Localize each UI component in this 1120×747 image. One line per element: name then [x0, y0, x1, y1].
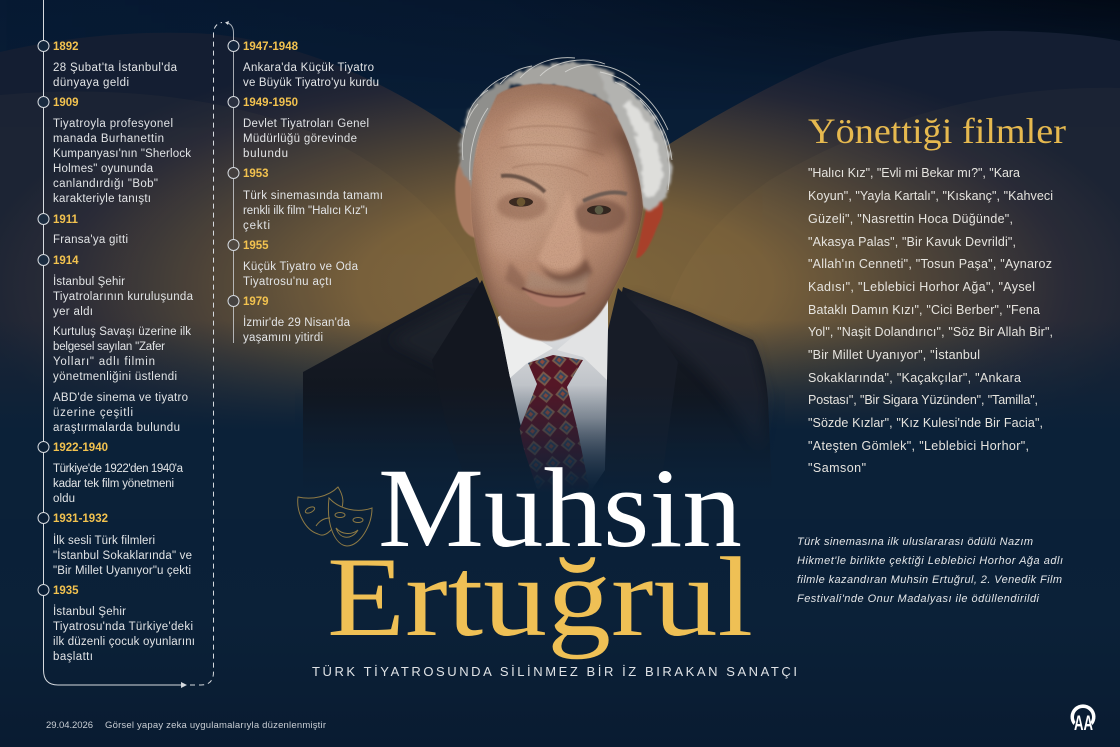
callout: award note: Festivali'nde Onur Madalyası ile ödüllendirildi	[797, 593, 1040, 605]
film list: Bataklı Damın Kızı", "Cici Berber", "Fena	[808, 303, 1040, 317]
milestone 1922-1940: 1922-1940	[53, 442, 108, 454]
milestone 1949-1950: 1949-1950	[243, 97, 298, 109]
timeline track	[44, 0, 234, 688]
film list: "Samson"	[808, 461, 866, 475]
film list: "Bir Millet Uyanıyor", "İstanbul	[808, 348, 980, 362]
milestone 1922-1940	[38, 442, 184, 505]
milestone 1909: Holmes" oyununda	[53, 163, 154, 175]
film list: "Ateşten Gömlek", "Leblebici Horhor",	[808, 439, 1029, 453]
milestone 1914: araştırmalarda bulundu	[53, 422, 180, 434]
milestone 1909: Kumpanyası'nın "Sherlock	[53, 148, 191, 160]
film list	[808, 166, 1053, 475]
milestone 1914: belgesel sayılan "Zafer	[53, 341, 165, 353]
milestone 1911: 1911	[53, 214, 79, 226]
milestone 1953: Türk sinemasında tamamı	[243, 190, 383, 202]
milestone 1914: yönetmenliğini üstlendi	[53, 371, 177, 383]
milestone 1979	[228, 296, 351, 344]
footer: 29.04.2026	[46, 720, 93, 731]
milestone 1922-1940: oldu	[53, 493, 75, 505]
milestone 1892: 1892	[53, 41, 79, 53]
milestone 1911	[38, 214, 128, 246]
milestone 1979: yaşamını yitirdi	[243, 332, 323, 344]
milestone 1955: Küçük Tiyatro ve Oda	[243, 261, 359, 273]
milestone 1935: başlattı	[53, 651, 93, 663]
milestone 1955	[228, 240, 359, 288]
suit	[303, 277, 772, 492]
milestone 1955: Tiyatrosu'nu açtı	[243, 276, 332, 288]
milestone 1914: Kurtuluş Savaşı üzerine ilk	[53, 326, 191, 338]
tie	[519, 355, 590, 492]
milestone 1892	[38, 40, 178, 89]
milestone 1947-1948: Ankara'da Küçük Tiyatro	[243, 62, 374, 74]
milestone 1909	[38, 96, 191, 205]
film list: Postası", "Bir Sigara Yüzünden", "Tamilla",	[808, 393, 1038, 407]
milestone 1947-1948: ve Büyük Tiyatro'yu kurdu	[243, 77, 379, 89]
milestone 1914: 1914	[53, 255, 79, 267]
film list: Güzeli", "Nasrettin Hoca Düğünde",	[808, 212, 1013, 226]
film list: "Sözde Kızlar", "Kız Kulesi'nde Bir Facia",	[808, 416, 1043, 430]
milestone 1914: ABD'de sinema ve tiyatro	[53, 392, 188, 404]
icon: theatre masks	[298, 487, 372, 546]
milestone 1949-1950: bulundu	[243, 148, 288, 160]
milestone 1909: karakteriyle tanıştı	[53, 193, 151, 205]
milestone 1979: 1979	[243, 296, 269, 308]
milestone 1892: dünyaya geldi	[53, 77, 129, 89]
milestone 1935: Tiyatrosu'nda Türkiye'deki	[53, 621, 193, 633]
milestone 1914: Tiyatrolarının kuruluşunda	[53, 291, 194, 303]
face	[471, 84, 643, 341]
milestone 1931-1932: İlk sesli Türk filmleri	[53, 534, 155, 547]
milestone 1909: 1909	[53, 97, 79, 109]
portrait: Muhsin Ertuğrul	[303, 58, 772, 492]
lapels	[432, 280, 538, 492]
milestone 1909: manada Burhanettin	[53, 133, 164, 145]
film list: Kadısı", "Leblebici Horhor Ağa", "Aysel	[808, 280, 1035, 294]
ears	[455, 159, 663, 258]
shirt	[498, 300, 608, 492]
eyes	[509, 197, 611, 215]
timeline column 1	[38, 40, 195, 663]
milestone 1931-1932	[38, 512, 192, 577]
callout: award note: Hikmet'le birlikte çektiği Leblebici Horhor Ağa adlı	[797, 555, 1063, 567]
icon: AA logo	[1070, 704, 1096, 735]
milestone 1935: 1935	[53, 585, 79, 597]
milestone 1911: Fransa'ya gitti	[53, 234, 128, 246]
milestone 1949-1950	[228, 96, 369, 160]
footer: Görsel yapay zeka uygulamalarıyla düzenlenmiştir	[105, 720, 326, 731]
milestone 1909: canlandırdığı "Bob"	[53, 178, 158, 190]
milestone 1914: üzerine çeşitli	[53, 407, 133, 419]
title	[327, 446, 753, 660]
film list: Sokaklarında", "Kaçakçılar", "Ankara	[808, 371, 1021, 385]
background	[0, 0, 1120, 418]
title: Ertuğrul: Ertuğrul	[327, 535, 753, 660]
milestone 1931-1932: "İstanbul Sokaklarında" ve	[53, 549, 192, 562]
milestone 1949-1950: Devlet Tiyatroları Genel	[243, 118, 369, 130]
milestone 1914: İstanbul Şehir	[53, 275, 125, 288]
milestone 1892: 28 Şubat'ta İstanbul'da	[53, 61, 178, 74]
timeline column 2	[228, 40, 383, 344]
callout: award note	[797, 536, 1063, 605]
film list: "Akasya Palas", "Bir Kavuk Devrildi",	[808, 235, 1016, 249]
icon: AA logo: AA	[1074, 712, 1093, 735]
heading: Yönettiği filmler	[808, 111, 1066, 151]
milestone 1953	[228, 168, 383, 232]
milestone 1935: İstanbul Şehir	[53, 605, 126, 618]
milestone 1953: renkli ilk film "Halıcı Kız"ı	[243, 205, 368, 217]
milestone 1914	[38, 254, 194, 434]
milestone 1935	[38, 584, 195, 663]
forehead wrinkles	[500, 126, 604, 176]
film list: "Halıcı Kız", "Evli mi Bekar mı?", "Kara	[808, 166, 1020, 180]
milestone 1949-1950: Müdürlüğü görevinde	[243, 133, 357, 145]
milestone 1914: yer aldı	[53, 306, 93, 318]
subtitle: TÜRK TİYATROSUNDA SİLİNMEZ BİR İZ BIRAKAN SANATÇI	[312, 664, 797, 679]
milestone 1931-1932: "Bir Millet Uyanıyor"u çekti	[53, 565, 191, 577]
collar	[498, 307, 608, 380]
milestone 1931-1932: 1931-1932	[53, 513, 108, 525]
milestone 1953: çekti	[243, 220, 270, 232]
milestone 1922-1940: kadar tek film yönetmeni	[53, 478, 174, 490]
portrait fade	[295, 385, 785, 493]
milestone 1922-1940: Türkiye'de 1922'den 1940'a	[53, 463, 184, 475]
milestone 1909: Tiyatroyla profesyonel	[53, 118, 173, 130]
film list: Koyun", "Yayla Kartalı", "Kıskanç", "Kahveci	[808, 189, 1053, 203]
panel: directed films	[808, 111, 1066, 475]
milestone 1955: 1955	[243, 240, 269, 252]
eyebrows	[501, 176, 627, 201]
film list: "Allah'ın Cenneti", "Tosun Paşa", "Aynaroz	[808, 257, 1052, 271]
milestone 1953: 1953	[243, 168, 269, 180]
film list: Yol", "Naşit Dolandırıcı", "Söz Bir Allah Bir",	[808, 325, 1053, 339]
milestone 1935: ilk düzenli çocuk oyunlarını	[53, 636, 195, 648]
title: Muhsin: Muhsin	[378, 446, 742, 571]
skin texture	[473, 104, 620, 341]
milestone 1947-1948: 1947-1948	[243, 41, 299, 53]
face shading	[471, 102, 643, 341]
callout: award note: Türk sinemasına ilk uluslararası ödülü Nazım	[797, 536, 1033, 548]
milestone 1947-1948	[228, 40, 379, 89]
milestone 1979: İzmir'de 29 Nisan'da	[243, 316, 351, 329]
hair	[460, 58, 672, 210]
milestone 1914: Yolları" adlı filmin	[53, 356, 155, 368]
callout: award note: filmle kazandıran Muhsin Ertuğrul, 2. Venedik Film	[797, 574, 1062, 586]
mouth	[522, 288, 585, 307]
